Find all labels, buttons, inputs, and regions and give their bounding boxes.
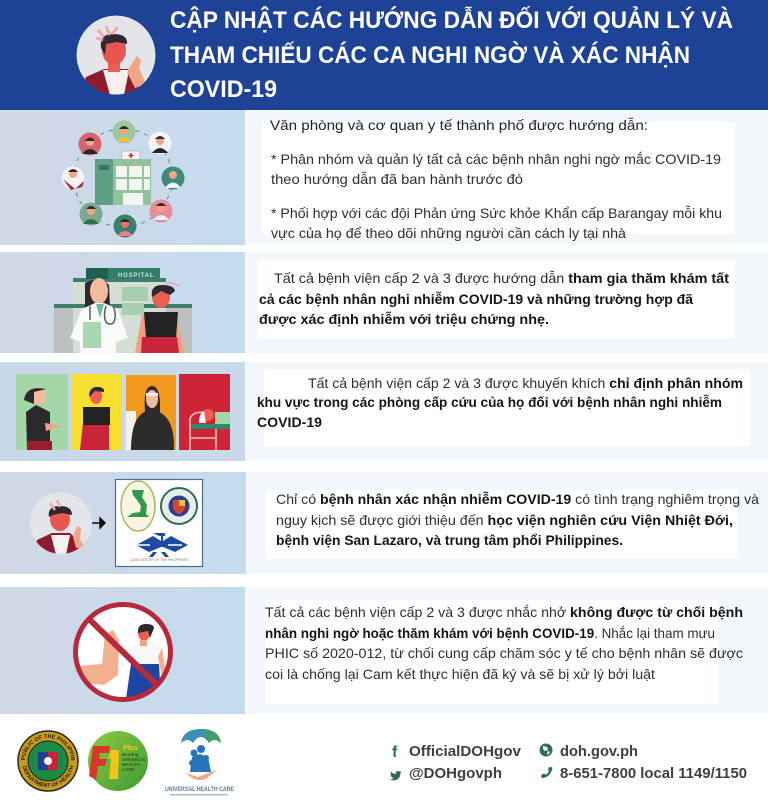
logo: Universal Health Care (165, 729, 234, 796)
title: THAM CHIẾU CÁC CA NGHI NGỜ VÀ XÁC NHẬN (170, 41, 690, 69)
logo: F1 Plus: HEALTH (122, 762, 140, 767)
logo box: RITM, San Lazaro, Lung Center (116, 480, 202, 566)
icon: patient avatar (30, 492, 92, 555)
footer logos (17, 729, 234, 796)
title (170, 5, 733, 103)
icon: doctor and patient at hospital (54, 268, 192, 353)
text: phone number: 8-651-7800 local 1149/1150 (560, 765, 747, 782)
text: city health office instructions: Văn phòng và cơ quan y tế thành phố được hướng dẫn: (270, 117, 648, 133)
text: no refusal reminder: nhân nghi ngờ hoặc thăm khám với bệnh COVID-19. Nhắc lại tham mưu (265, 625, 715, 641)
text: referral instruction (276, 491, 759, 548)
text: triage instruction: COVID-19 (257, 414, 322, 430)
text: city health office instructions (270, 117, 722, 241)
panel: no refusal of patients (0, 587, 768, 714)
text: triage instruction (257, 375, 743, 430)
icon: coughing patient (76, 16, 156, 95)
logo: F1 Plus (88, 731, 148, 791)
icon: doctor and patient at hospital: HOSPITAL (118, 273, 154, 279)
text: consult instruction: được xác định nhiễm với triệu chứng nhẹ. (259, 311, 549, 327)
icon: hospital with circle of people (62, 120, 184, 238)
panel: city health offices (0, 110, 768, 245)
text: no refusal reminder: Tất cả các bệnh viện cấp 2 và 3 được nhắc nhở không được từ chối bệnh (265, 604, 743, 620)
icon: globe (540, 744, 552, 756)
icon: four coloured triage tiles (16, 374, 230, 450)
logo: F1 Plus: CARE (122, 767, 135, 772)
text: no refusal reminder: PHIC số 2020-012, từ chối cung cấp chăm sóc y tế cho bệnh nhân sẽ được (265, 645, 743, 661)
logo: F1 Plus: Plus (123, 745, 138, 752)
logo: Universal Health Care: UNIVERSAL HEALTH CARE (165, 786, 234, 793)
icon: twitter (390, 771, 401, 780)
text: consult instruction (259, 270, 729, 327)
logo: F1 Plus: Beating (122, 752, 139, 757)
header banner (0, 0, 768, 110)
text: facebook handle: OfficialDOHgov (409, 743, 522, 760)
text: triage instruction: khu vực trong các phòng cấp cứu của họ đối với bệnh nhân nghi nhiễm (257, 394, 722, 410)
icon: prohibition sign with refused patient (76, 604, 170, 700)
text: twitter handle: @DOHgovph (409, 765, 502, 782)
panel: referral of severe confirmed patients (0, 472, 768, 574)
text: consult instruction: Tất cả bệnh viện cấp 2 và 3 được hướng dẫn tham gia thăm khám tất (274, 270, 729, 286)
logo: F1 Plus: UNIVERSAL (122, 757, 146, 762)
logo box: RITM, San Lazaro, Lung Center: LUNG CENTER OF THE PHILIPPINES (130, 558, 189, 562)
text: triage instruction: Tất cả bệnh viện cấp 2 và 3 được khuyến khích chỉ định phân nhóm (308, 375, 743, 391)
text: city health office instructions: * Phối hợp với các đội Phản ứng Sức khỏe Khẩn cấp Barangay mỗi khu (271, 205, 722, 221)
text: referral instruction: nguy kịch sẽ được giới thiệu đến học viện nghiên cứu Viện Nhiệt Đới, (276, 512, 733, 528)
logo: Department of Health seal (17, 730, 79, 792)
title: COVID-19 (170, 76, 277, 103)
text: city health office instructions: * Phân nhóm và quản lý tất cả các bệnh nhân nghi ngờ mắc COVID-19 (271, 151, 721, 167)
logo: Department of Health seal: DEPARTMENT OF HEALTH (22, 766, 74, 787)
text: no refusal reminder (265, 604, 743, 682)
text: city health office instructions: theo hướng dẫn đã ban hành trước đó (271, 171, 523, 187)
arrow (92, 518, 105, 528)
icon: facebook: f (392, 744, 398, 761)
icon: phone (541, 767, 552, 778)
text: city health office instructions: vực của họ để theo dõi những người cần cách ly tại nhà (271, 225, 626, 241)
footer contacts (390, 743, 747, 782)
text: no refusal reminder: coi là chống lại Cam kết thực hiện đã ký và sẽ bị xử lý bởi luật (265, 666, 655, 682)
text: website: doh.gov.ph (560, 743, 638, 760)
text: referral instruction: Chỉ có bệnh nhân xác nhận nhiễm COVID-19 có tình trạng nghiêm trọng và (276, 491, 759, 507)
title: CẬP NHẬT CÁC HƯỚNG DẪN ĐỐI VỚI QUẢN LÝ VÀ (170, 5, 733, 34)
panel: level 2 and 3 hospitals consult (0, 252, 768, 353)
text: consult instruction: cả các bệnh nhân nghi nhiễm COVID-19 và những trường hợp đã (259, 291, 693, 307)
text: referral instruction: bệnh viện San Lazaro, và trung tâm phổi Philippines. (276, 532, 623, 548)
panel: triage zones (0, 362, 768, 461)
